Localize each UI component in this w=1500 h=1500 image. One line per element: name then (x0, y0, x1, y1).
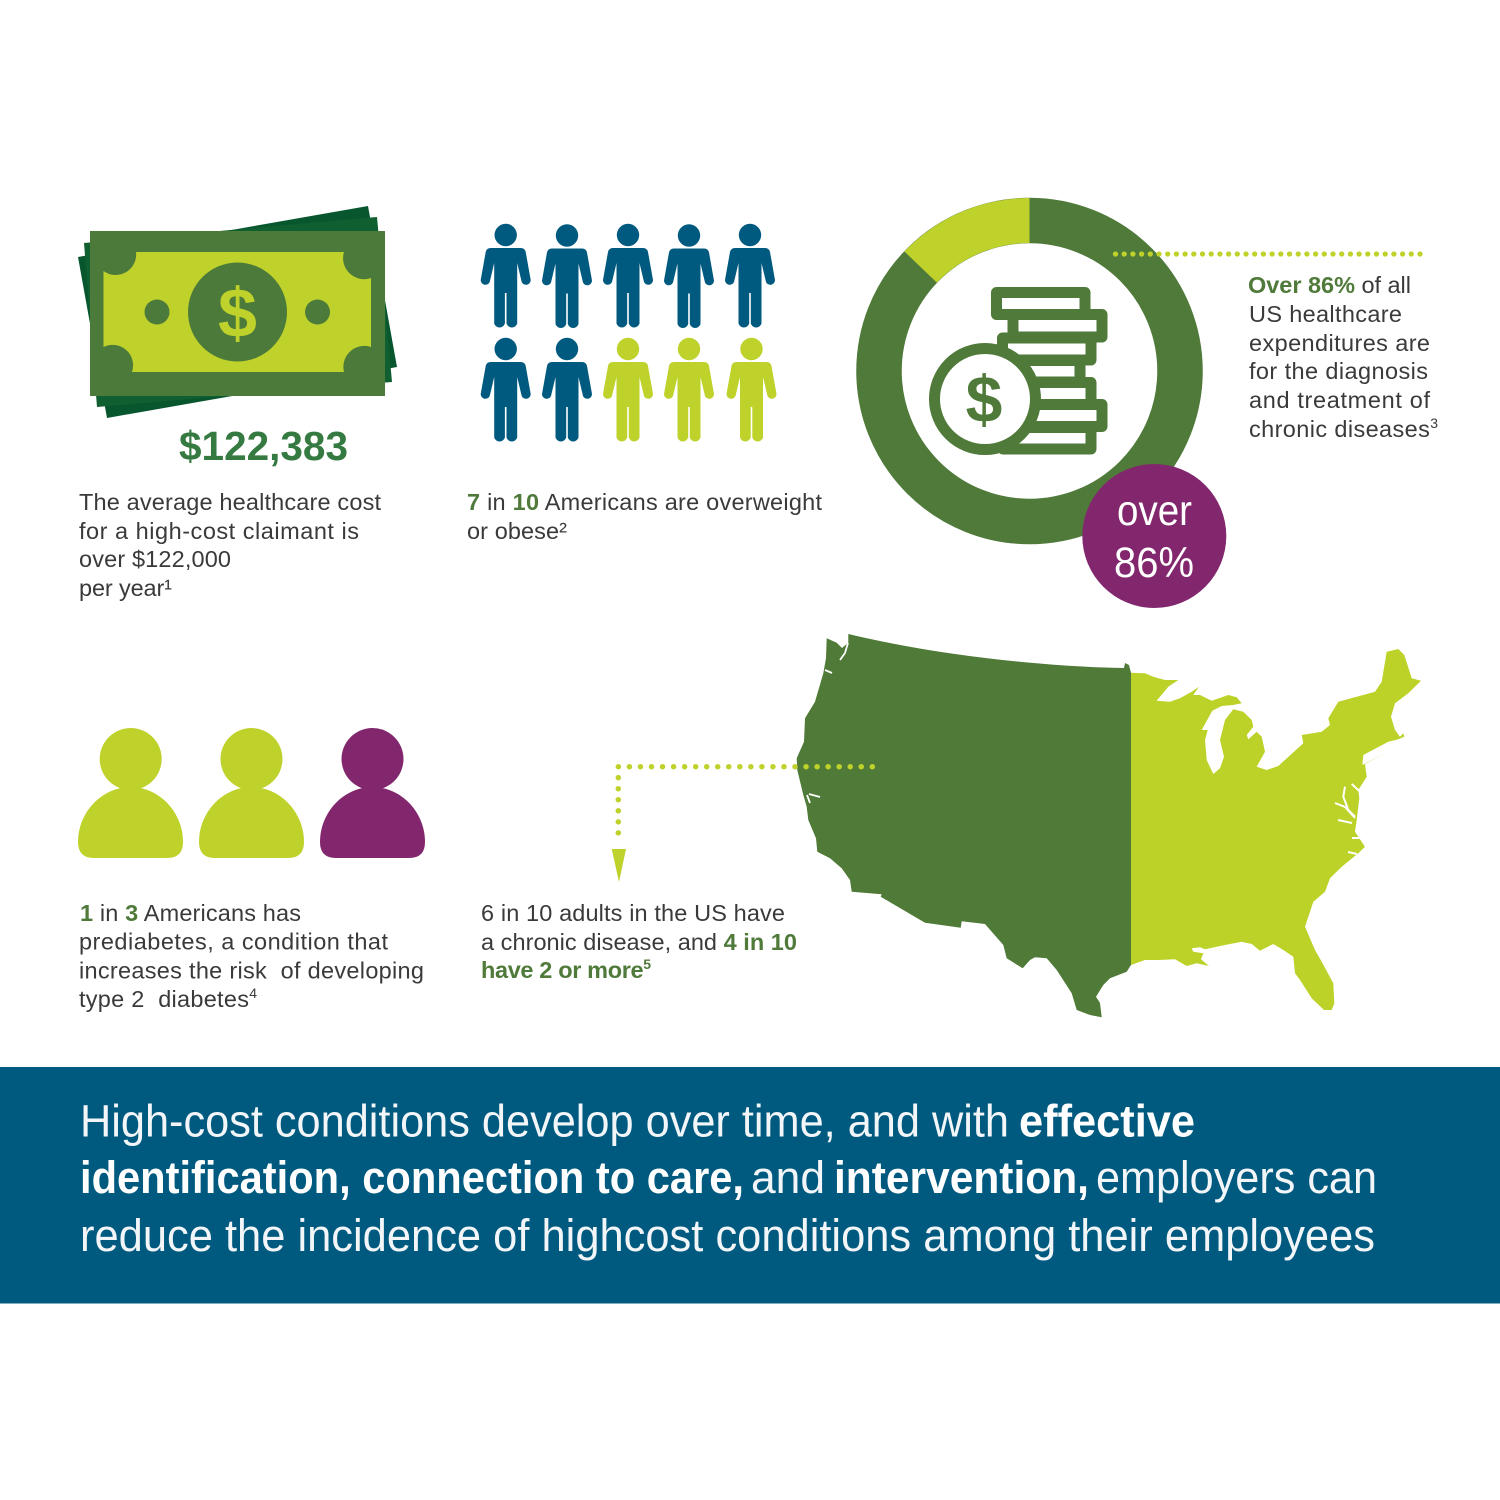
text block: healthcare expenditures: 3 (1430, 415, 1438, 431)
text block: healthcare expenditures: chronic diseases (1249, 416, 1430, 442)
text block: healthcare expenditures: US healthcare (1249, 301, 1402, 327)
text block: healthcare expenditures (1248, 272, 1438, 442)
banner text: and (751, 1152, 825, 1203)
text block: average healthcare cost: The average healthcare cost (79, 489, 381, 515)
banner text: effective (1019, 1096, 1195, 1146)
icon: coin stack (934, 292, 1102, 450)
text block: healthcare expenditures: expenditures are (1249, 330, 1430, 356)
text block: 7 in 10 overweight: 7 in 10 Americans are overweight (467, 489, 822, 515)
badge: over 86%: 86% (1114, 539, 1194, 587)
banner: conclusion (0, 1067, 1500, 1304)
donut chart: over 86% (879, 198, 1180, 522)
text block: average healthcare cost: for a high-cost claimant is (79, 518, 359, 544)
text block: chronic disease: 6 in 10 adults in the US have (481, 900, 785, 926)
pictogram: 1 in 3 people (78, 728, 425, 858)
banner text: reduce the incidence of highcost conditions among their employees (80, 1210, 1375, 1261)
text block: healthcare expenditures: Over 86% of all (1248, 272, 1411, 298)
text block: healthcare expenditures: and treatment of (1249, 387, 1430, 413)
icon: coin stack: $ (966, 362, 1002, 436)
banner text: identification, connection to care, (80, 1152, 744, 1203)
text block: 7 in 10 overweight (467, 489, 822, 544)
text block: average healthcare cost: over $122,000 (79, 546, 231, 572)
banner text: High-cost conditions develop over time, and with (80, 1096, 1009, 1146)
dotted leader: donut to text (1116, 251, 1421, 257)
text block: prediabetes: 1 in 3 Americans has (80, 900, 301, 926)
map: western states (797, 634, 1131, 1017)
pictogram: 7 in 10 people (481, 224, 777, 441)
map: eastern states (1131, 649, 1421, 1010)
banner text: intervention, (834, 1152, 1089, 1203)
text block: prediabetes: 4 (249, 985, 257, 1001)
map: United States split in two colours (797, 634, 1421, 1017)
badge: over 86% (1082, 464, 1226, 608)
heading: cost figure: $122,383 (179, 423, 348, 469)
badge: over 86%: over (1117, 487, 1192, 535)
text block: chronic disease: have 2 or more (481, 957, 644, 983)
text block: chronic disease (481, 900, 797, 983)
icon: stack of dollar bills (78, 206, 397, 418)
text block: average healthcare cost (79, 489, 381, 601)
text block: 7 in 10 overweight: or obese² (467, 518, 567, 544)
banner text: employers can (1096, 1152, 1377, 1203)
text block: prediabetes: type 2 diabetes (79, 986, 249, 1012)
text block: chronic disease: 5 (643, 956, 651, 972)
text block: average healthcare cost: per year¹ (79, 575, 172, 601)
text block: chronic disease: a chronic disease, and 4 in 10 (481, 929, 797, 955)
icon: stack of dollar bills: $ (218, 274, 257, 352)
text block: prediabetes: increases the risk of developing (79, 958, 424, 984)
text block: prediabetes: prediabetes, a condition that (79, 928, 388, 954)
text block: healthcare expenditures: for the diagnosis (1249, 358, 1428, 384)
banner text (80, 1096, 1377, 1261)
dotted arrow: map to text (612, 767, 872, 882)
text block: prediabetes (79, 900, 424, 1012)
